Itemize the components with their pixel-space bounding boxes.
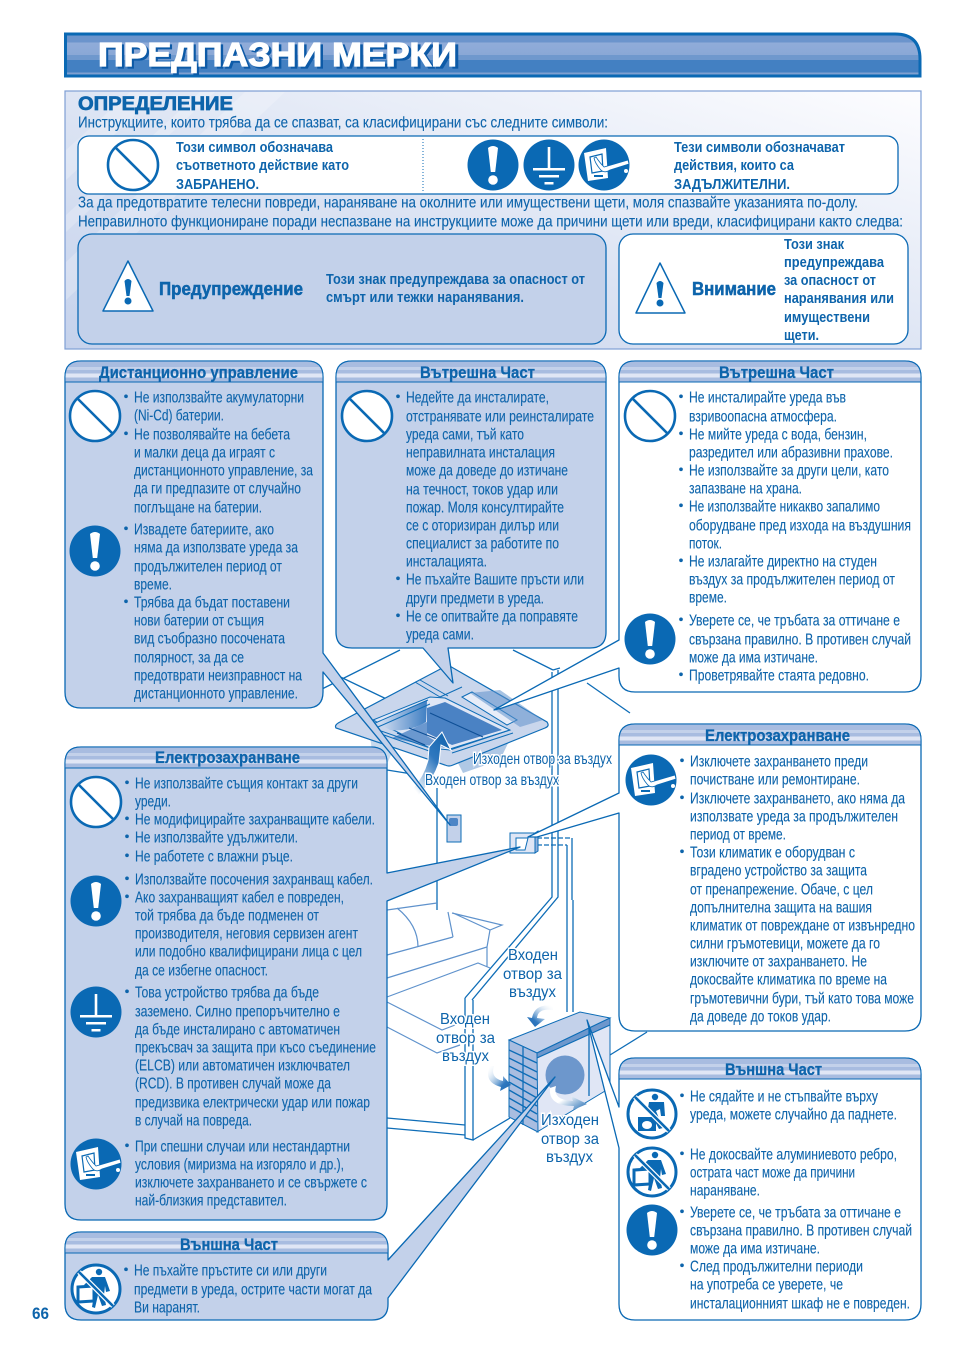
panel: outdoor unit, left	[65, 1077, 555, 1320]
instructions: нараняване.	[690, 1182, 760, 1199]
symbols box	[78, 136, 898, 194]
heading: Дистанционно управление	[99, 364, 298, 382]
heading: Външна Част	[180, 1236, 278, 1254]
outdoor unit	[509, 1012, 610, 1132]
instructions: Не излагайте директно на студен	[689, 553, 877, 570]
mandatory instructions: Извадете батериите, ако	[134, 521, 274, 538]
labels: air openings: въздух	[442, 1048, 489, 1065]
mandatory instructions: няма да използвате уреда за	[134, 539, 298, 556]
heading: Външна Част	[725, 1061, 822, 1079]
labels: air openings: въздух	[546, 1149, 593, 1166]
instructions: да се избегне опасност.	[135, 962, 268, 979]
arrow: outdoor air in side	[488, 1066, 511, 1091]
caution description: предупреждава	[784, 255, 885, 271]
instructions: да доведе до токов удар.	[690, 1008, 831, 1025]
instructions: Не сядайте и не стъпвайте върху	[690, 1088, 878, 1105]
instructions: Не използвайте никакво запалимо	[689, 498, 880, 515]
icon: switch off	[578, 140, 630, 190]
prohibited description	[176, 140, 349, 193]
instructions: Не работете с влажни ръце.	[135, 848, 293, 865]
labels: air openings: отвор за	[503, 966, 562, 983]
instructions: отстранявате или реинсталирате	[406, 408, 594, 425]
prohibited instructions	[124, 389, 313, 516]
icon: sofa	[387, 903, 502, 1053]
mandatory description: ЗАДЪЛЖИТЕЛНИ.	[674, 177, 790, 193]
panel: outdoor unit, right	[587, 1020, 921, 1320]
instructions: може да доведе до изтичане	[406, 462, 568, 479]
caution label: Внимание	[692, 279, 776, 299]
panel: power supply, right	[528, 724, 921, 1031]
instructions: или подобно квалифицирани лица с цел	[135, 943, 362, 960]
instructions: може да има изтичане.	[690, 1240, 820, 1257]
instructions: той трябва да бъде подменен от	[135, 907, 320, 924]
mandatory instructions	[124, 521, 302, 702]
icon: wall switch	[510, 831, 538, 853]
labels: air openings: отвор за	[436, 1030, 495, 1047]
instructions: уреда сами, тъй като	[406, 426, 524, 443]
instructions: инсталацията.	[406, 553, 487, 570]
mandatory instructions: време.	[134, 576, 172, 593]
prohibited description: съответното действие като	[176, 158, 349, 174]
instructions: Този климатик е оборудван с	[690, 844, 855, 861]
instructions: се с оторизиран дилър или	[406, 517, 559, 534]
instructions: на течност, токов удар или	[406, 481, 558, 498]
icon: remote holder	[447, 815, 461, 842]
prohibited instructions: и малки деца да играят с	[134, 444, 275, 461]
icon: switch off	[70, 1138, 122, 1190]
instructions	[125, 775, 376, 1209]
instructions: най-близкия представител.	[135, 1192, 287, 1209]
panel: indoor unit, right	[494, 361, 921, 710]
instructions: заземено. Силно препоръчително е	[135, 1003, 340, 1020]
caution description: Този знак	[784, 237, 845, 253]
instructions: Не се опитвайте да поправяте	[406, 608, 578, 625]
instructions: Не използвайте същия контакт за други	[135, 775, 358, 792]
mandatory instructions: нови батерии от същия	[134, 612, 264, 629]
icon: do not sit	[628, 1090, 676, 1138]
instructions: (ELCB) или автоматичен изключвател	[135, 1057, 350, 1074]
instructions: неправилната инсталация	[406, 444, 555, 461]
instructions: разредител или абразивни прахове.	[689, 444, 893, 461]
labels: air openings: Изходен	[541, 1112, 599, 1129]
warning description: Този знак предупреждава за опасност от	[326, 272, 585, 288]
instructions: Ви наранят.	[134, 1299, 200, 1316]
icon: prohibited	[71, 777, 121, 827]
arrow: outdoor air in top	[527, 1006, 553, 1027]
instructions: Не използвайте удължители.	[135, 829, 298, 846]
mandatory instructions: предотврати неизправност на	[134, 667, 302, 684]
instructions: поток.	[689, 535, 722, 552]
warning box	[78, 234, 606, 344]
instructions: производителя, неговия сервизен агент	[135, 925, 359, 942]
icon: earth	[524, 140, 574, 190]
instructions: уреди.	[135, 793, 171, 810]
icon: mandatory	[70, 876, 122, 926]
instructions: острата част може да причини	[690, 1164, 855, 1181]
instructions: Това устройство трябва да бъде	[135, 984, 319, 1001]
instructions: други предмети в уреда.	[406, 590, 544, 607]
warning label: Предупреждение	[159, 279, 303, 299]
instructions: Не използвайте за други цели, като	[689, 462, 889, 479]
heading: Електрозахранване	[155, 749, 300, 767]
icon: do not insert fingers	[72, 1265, 120, 1313]
heading: Електрозахранване	[705, 727, 850, 745]
instructions: Не инсталирайте уреда във	[689, 389, 846, 406]
instructions: период от време.	[690, 826, 786, 843]
icon: earth	[70, 986, 122, 1038]
mandatory instructions: продължителен период от	[134, 558, 283, 575]
mandatory instructions: полярност, за да се	[134, 649, 244, 666]
panel: indoor unit, middle	[336, 361, 606, 683]
instructions: пожар. Моля консултирайте	[406, 499, 564, 516]
instructions: изключите от захранването. Не	[690, 953, 867, 970]
labels: air openings: Входен	[508, 947, 558, 964]
instructions: условия (миризма на изгоряло и др.),	[135, 1156, 344, 1173]
instructions: специалист за работите по	[406, 535, 559, 552]
panel: power supply, left	[65, 747, 520, 1220]
instructions: Не модифицирайте захранващите кабели.	[135, 811, 375, 828]
instructions: вградено устройство за защита	[690, 862, 867, 879]
prohibited instructions: (Ni-Cd) батерии.	[134, 407, 224, 424]
instructions: взривоопасна атмосфера.	[689, 408, 837, 425]
instructions: Не мийте уреда с вода, бензин,	[689, 426, 867, 443]
icon: prohibited	[108, 140, 158, 190]
heading: Вътрешна Част	[719, 364, 834, 382]
instructions	[680, 753, 915, 1025]
ceiling and wall lines	[320, 650, 647, 1140]
instructions: запазване на храна.	[689, 480, 802, 497]
instructions: докосвайте климатика по време на	[690, 971, 887, 988]
icon: switch off	[626, 754, 676, 806]
heading: Вътрешна Част	[420, 364, 535, 382]
indoor cassette unit	[336, 665, 548, 773]
icon: prohibited	[70, 391, 120, 441]
instructions	[124, 1262, 372, 1316]
instructions: Не пъхайте пръстите си или други	[134, 1262, 327, 1279]
prohibited description: Този символ обозначава	[176, 140, 334, 156]
warning description	[326, 272, 585, 306]
prohibited instructions: дистанционното управление, за	[134, 462, 313, 479]
prohibited description: ЗАБРАНЕНО.	[176, 177, 259, 193]
heading: definition: ОПРЕДЕЛЕНИЕ	[78, 94, 233, 115]
caution description: наранявания или	[784, 291, 894, 307]
icon: mandatory	[70, 526, 120, 576]
labels: air openings	[425, 751, 612, 1166]
icon: prohibited	[342, 391, 392, 441]
caution description: имуществени	[784, 310, 870, 326]
mandatory instructions: Трябва да бъдат поставени	[134, 594, 290, 611]
panel: definition	[65, 91, 921, 349]
labels: air openings: Изходен отвор за въздух	[473, 751, 612, 768]
caution description	[784, 237, 894, 344]
instructions: време.	[689, 589, 727, 606]
title banner	[66, 34, 920, 76]
caution description: щети.	[784, 328, 819, 344]
icon: prohibited	[625, 391, 675, 441]
instructions: Използвайте посочения захранващ кабел.	[135, 871, 373, 888]
instructions	[679, 389, 911, 684]
instructions: Ако захранващият кабел е повреден,	[135, 889, 344, 906]
instructions: да бъде инсталирано с автоматичен	[135, 1021, 340, 1038]
warning description: смърт или тежки наранявания.	[326, 290, 524, 306]
prohibited instructions: Не позволявайте на бебета	[134, 426, 290, 443]
explanatory text	[78, 194, 903, 230]
prohibited instructions: Не използвайте акумулаторни	[134, 389, 304, 406]
mandatory instructions: вид съобразно посочената	[134, 630, 285, 647]
mandatory description: действия, които са	[674, 158, 795, 174]
instructions: Недейте да инсталирате,	[406, 389, 549, 406]
title banner: ПРЕДПАЗНИ МЕРКИ	[100, 38, 460, 75]
instructions: в случай на повреда.	[135, 1112, 252, 1129]
instructions: почистване или ремонтиране.	[690, 771, 860, 788]
instructions: изключете захранването и се свържете с	[135, 1174, 367, 1191]
prohibited instructions: да ги предпазите от случайно	[134, 480, 301, 497]
arrow: indoor air inlet	[388, 732, 451, 812]
instructions: прекъсвач за защита при късо съединение	[135, 1039, 376, 1056]
instructions: на употреба се уверете, че	[690, 1276, 843, 1293]
arrow: outdoor air out	[550, 1086, 587, 1110]
icon: caution triangle	[636, 263, 685, 313]
instructions: След продължителни периоди	[690, 1258, 863, 1275]
labels: air openings: Входен отвор за въздух	[425, 772, 559, 789]
instructions: силни гръмотевици, можете да го	[690, 935, 880, 952]
instructions: предмети в уреда, острите части могат да	[134, 1281, 372, 1298]
icon: warning triangle	[103, 261, 153, 311]
mandatory description: Тези символи обозначават	[674, 140, 845, 156]
title banner: ПРЕДПАЗНИ МЕРКИ	[98, 36, 457, 73]
caution description: за опасност от	[784, 273, 876, 289]
instructions: Не пъхайте Вашите пръсти или	[406, 571, 584, 588]
icon: mandatory	[626, 1204, 678, 1256]
instructions: Проветрявайте стаята редовно.	[689, 667, 869, 684]
instructions: уреда сами.	[406, 626, 474, 643]
mandatory description	[674, 140, 845, 193]
icon: do not touch fin	[628, 1148, 676, 1196]
prohibited instructions: поглъщане на батерии.	[134, 499, 262, 516]
instructions: Изключете захранването преди	[690, 753, 868, 770]
instructions: от пренапрежение. Обаче, с цел	[690, 881, 873, 898]
page number: 66	[32, 1304, 49, 1323]
instructions: може да има изтичане.	[689, 649, 818, 666]
instructions: допълнителна защита на вашия	[690, 899, 872, 916]
mandatory instructions: дистанционното управление.	[134, 685, 298, 702]
labels: air openings: Входен	[440, 1011, 490, 1028]
labels: air openings: отвор за	[541, 1131, 599, 1148]
panel: remote control	[65, 361, 450, 825]
labels: air openings: въздух	[509, 984, 556, 1001]
instructions	[680, 1088, 912, 1312]
caution box	[619, 234, 908, 344]
intro text: Инструкциите, които трябва да се спазват, са класифицирани със следните символи:	[78, 114, 608, 131]
instructions: въздух за продължителен период от	[689, 571, 896, 588]
instructions: предизвика електрически удар или пожар	[135, 1094, 370, 1111]
instructions	[396, 389, 594, 643]
instructions: (RCD). В противен случай може да	[135, 1075, 331, 1092]
instructions: При спешни случаи или нестандартни	[135, 1138, 350, 1155]
room illustration	[320, 650, 647, 1166]
icon: mandatory	[624, 614, 676, 664]
icon: mandatory	[468, 140, 518, 190]
